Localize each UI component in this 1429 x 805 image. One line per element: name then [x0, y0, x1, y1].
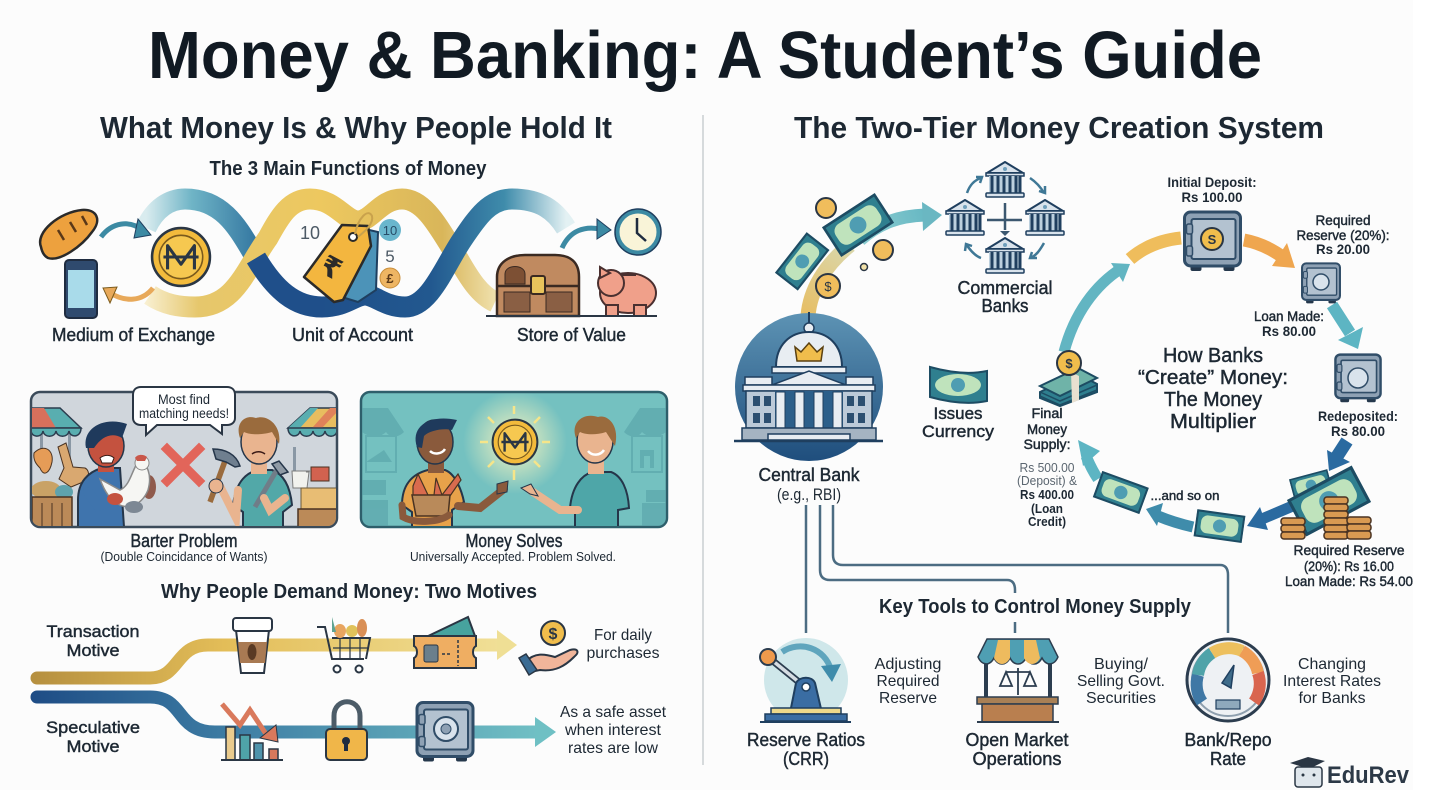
- label: bank repo rate: Bank/Repo: [1184, 730, 1272, 750]
- text: final money supply values: Rs 500.00: [1020, 461, 1075, 475]
- icon: price tag: ₹: [315, 249, 347, 286]
- logo text: EduRev: [1327, 762, 1410, 789]
- icon: market stall with scales: [977, 639, 1059, 722]
- label: transaction motive: [46, 622, 140, 660]
- centre heading: money multiplier: “Create” Money:: [1138, 367, 1288, 389]
- label: central bank: (e.g., RBI): [777, 485, 841, 504]
- icon: coin: [152, 228, 210, 286]
- label: issues currency: Issues: [934, 404, 982, 423]
- panel: commercial banks: [946, 162, 1064, 316]
- arrow head: [103, 287, 117, 303]
- heading: right section: The Two-Tier Money Creation System: [794, 110, 1324, 145]
- subheading: two motives: Why People Demand Money: Two Motives: [161, 581, 537, 603]
- arrow: teal arc to commercial banks: [860, 202, 942, 240]
- label: speculative motive: Motive: [66, 737, 120, 756]
- arrow: gold arc from central bank: [808, 245, 850, 316]
- arc arrow: final supply to initial deposit: [1064, 263, 1130, 352]
- faded stalls: [362, 408, 666, 527]
- illustration background: [31, 392, 337, 527]
- text: numbers around tag: 10: [383, 223, 397, 238]
- subheading: functions: The 3 Main Functions of Money: [210, 158, 487, 180]
- label: open market operations: [966, 730, 1068, 769]
- centre heading: money multiplier: [1138, 345, 1288, 433]
- text: changing interest rates: [1283, 656, 1381, 707]
- label: issues currency: Currency: [922, 422, 995, 441]
- text: buying selling securities: Securities: [1086, 690, 1156, 707]
- text: adjusting required reserve: Required: [876, 673, 940, 690]
- icon: piggy bank: [598, 267, 656, 316]
- label: and so on: ...and so on: [1150, 488, 1220, 503]
- icon: price tag: [304, 213, 378, 302]
- label: redeposited: Rs 80.00: [1331, 423, 1385, 439]
- illustration contents: [362, 390, 666, 527]
- label: loan made: Rs 80.00: [1262, 323, 1316, 339]
- stall: left awning and goods: [31, 408, 89, 527]
- icon: final money stack: $: [1065, 356, 1073, 371]
- icon: banknote centre: [935, 374, 981, 396]
- label: required reserve: Reserve (20%):: [1296, 227, 1390, 243]
- icon: coffee cup: [233, 618, 272, 673]
- icon: reserve safe: [1302, 263, 1340, 303]
- connector lines: central bank to tools: [806, 505, 1228, 633]
- icon: safe: [417, 702, 473, 762]
- icon: falling chart: [221, 704, 283, 760]
- label: commercial banks: Banks: [982, 296, 1028, 316]
- label: loan made: [1254, 308, 1324, 339]
- label: open market operations: Operations: [972, 749, 1062, 769]
- text: final money supply values: (Deposit) &: [1017, 474, 1078, 488]
- label: initial deposit: [1168, 174, 1256, 205]
- arrow: coin to phone: [110, 288, 153, 299]
- panel: open market operations: [966, 639, 1165, 769]
- text: numbers around tag: 5: [385, 247, 395, 266]
- icon: ticket: [414, 617, 476, 668]
- icon: redeposit safe: [1335, 355, 1381, 402]
- figure: customer with groceries: [402, 418, 508, 527]
- icon: hand with coin: [519, 621, 577, 675]
- label: commercial banks: Commercial: [958, 278, 1052, 298]
- icon: money pile and coins: [1281, 468, 1371, 539]
- illustration background: [361, 392, 667, 527]
- caption: money solves: Universally Accepted. Problem Solved.: [410, 549, 616, 564]
- label: final money supply: Final: [1032, 406, 1062, 421]
- arc arrow: orange to reserve: [1244, 240, 1295, 268]
- figure: frustrated man with chicken: [78, 421, 156, 527]
- label: transaction motive: Transaction: [46, 622, 140, 641]
- label: initial deposit: Initial Deposit:: [1168, 174, 1256, 190]
- label: initial deposit: Rs 100.00: [1182, 189, 1243, 205]
- heading: key tools: Key Tools to Control Money Supply: [879, 596, 1192, 618]
- road: transaction motive: [37, 630, 517, 678]
- icon: bank network: [946, 162, 1064, 273]
- icon: red X: [167, 449, 199, 481]
- road: speculative motive: [37, 697, 556, 747]
- label: loan made: Loan Made:: [1254, 308, 1324, 324]
- label: required reserve: Required: [1316, 212, 1370, 228]
- centre heading: money multiplier: How Banks: [1163, 345, 1263, 367]
- text: final money supply values: Credit): [1028, 515, 1066, 529]
- label: central bank: [758, 465, 860, 504]
- label: reserve ratios: Reserve Ratios: [747, 730, 865, 750]
- text: buying selling securities: Buying/: [1094, 656, 1149, 673]
- label: safe asset: rates are low: [568, 740, 658, 757]
- label: barter problem: Barter Problem: [130, 531, 238, 551]
- figure: shopkeeper: [521, 416, 629, 527]
- panel: money multiplier cycle: [1017, 174, 1413, 589]
- label: required reserve: [1296, 212, 1390, 257]
- label: bank repo rate: Rate: [1210, 749, 1246, 769]
- text: numbers around tag: 10: [300, 223, 320, 243]
- icon: banknotes and coins: [776, 195, 893, 298]
- divider: [702, 115, 704, 765]
- icon: bread: [40, 210, 97, 259]
- label: final money supply: [1024, 406, 1070, 452]
- heading: left section: What Money Is & Why People Hold It: [100, 110, 612, 145]
- panel: issues currency: [922, 367, 995, 441]
- label: speculative motive: [46, 718, 140, 756]
- icon: central bank building: [734, 312, 883, 461]
- text: numbers around tag: £: [386, 271, 394, 286]
- icon: glowing coin: [466, 393, 564, 490]
- panel: motives for demanding money: [37, 581, 667, 762]
- panel: reserve ratios: [747, 638, 942, 769]
- ribbon: intertwined gold and blue: [146, 199, 566, 307]
- label: for daily purchases: [586, 627, 660, 662]
- icon: lever: [760, 638, 851, 722]
- label: bank repo rate: [1184, 730, 1272, 769]
- speech bubble: matching needs!: [139, 406, 229, 421]
- text: adjusting required reserve: Adjusting: [874, 656, 942, 673]
- caption: barter: (Double Coincidance of Wants): [100, 549, 268, 564]
- icon: clock: [615, 209, 661, 255]
- label: redeposited: Redeposited:: [1318, 408, 1398, 424]
- label: reserve ratios: (CRR): [783, 749, 829, 769]
- arrow head: [597, 219, 611, 239]
- logo: EduRev: [1290, 757, 1410, 789]
- label: redeposited: [1318, 408, 1398, 439]
- icon: main safe: [1184, 212, 1240, 271]
- centre heading: money multiplier: Multiplier: [1170, 411, 1256, 433]
- arrow: redeposit to money pile: [1327, 441, 1350, 471]
- text: adjusting required reserve: [874, 656, 942, 707]
- text: buying selling securities: Selling Govt.: [1077, 673, 1165, 690]
- label: safe asset: [560, 704, 667, 757]
- panel: money solves: [361, 390, 667, 564]
- arc arrow: gold into safe: [1130, 238, 1181, 259]
- label: required reserve: Rs 20.00: [1316, 241, 1370, 257]
- label: required reserve and loan: Loan Made: Rs 54.00: [1285, 573, 1413, 589]
- label: store of value: Store of Value: [517, 325, 626, 345]
- label: unit of account: Unit of Account: [292, 325, 413, 345]
- label: issues currency: [922, 404, 995, 441]
- icon: note two: [1094, 472, 1148, 513]
- icon: banknotes and coins: $: [824, 279, 832, 294]
- centre heading: money multiplier: The Money: [1164, 389, 1262, 411]
- label: safe asset: when interest: [564, 722, 662, 739]
- ground line: [486, 315, 657, 317]
- arrow: pile to note: [1247, 505, 1295, 530]
- text: adjusting required reserve: Reserve: [879, 690, 937, 707]
- arrow: note to second note: [1146, 503, 1193, 527]
- label: final money supply: Supply:: [1024, 437, 1070, 452]
- icon: hand with coin: $: [549, 626, 558, 643]
- text: final money supply values: [1017, 461, 1078, 529]
- panel: three functions of money: [40, 158, 661, 345]
- label: required reserve and loan: [1285, 542, 1413, 589]
- text: numbers around tag: [300, 219, 401, 288]
- text: changing interest rates: Interest Rates: [1283, 673, 1381, 690]
- label: final money supply: Money: [1027, 422, 1067, 437]
- text: changing interest rates: for Banks: [1298, 690, 1366, 707]
- icon: gauge: [1187, 639, 1269, 721]
- icon: note one: [1195, 510, 1244, 542]
- stall: right awning and counter: [288, 408, 337, 527]
- label: open market operations: Open Market: [966, 730, 1068, 750]
- arrow: chest to clock: [562, 228, 600, 248]
- label: required reserve and loan: (20%): Rs 16.00: [1304, 558, 1394, 574]
- label: for daily purchases: purchases: [586, 645, 660, 662]
- arrow: reserve to redeposit: [1332, 305, 1363, 349]
- icon: treasure chest: [497, 255, 579, 316]
- title: Money & Banking: A Student’s Guide: [148, 18, 1262, 93]
- figure: man with hammer: [209, 417, 292, 527]
- label: medium of exchange: Medium of Exchange: [52, 325, 215, 345]
- label: safe asset: As a safe asset: [560, 704, 667, 721]
- arrow: note to final supply: [1078, 440, 1100, 479]
- illustration contents: [31, 408, 337, 527]
- label: transaction motive: Motive: [66, 641, 120, 660]
- text: buying selling securities: [1077, 656, 1165, 707]
- label: reserve ratios: [747, 730, 865, 769]
- icon: shopping cart: [317, 617, 370, 672]
- label: commercial banks: [958, 278, 1052, 316]
- panel: central bank: [734, 195, 942, 504]
- icon: padlock: [326, 702, 367, 760]
- panel: bank repo rate: [1184, 639, 1381, 769]
- speech bubble: Most find: [158, 392, 210, 407]
- label: required reserve and loan: Required Reserve: [1294, 542, 1405, 558]
- label: speculative motive: Speculative: [46, 718, 140, 737]
- panel: barter problem: [31, 387, 337, 564]
- icon: phone: [65, 260, 97, 318]
- icon: final money stack: [1040, 351, 1097, 406]
- label: money solves: Money Solves: [466, 531, 562, 551]
- icon: banknote: [930, 367, 987, 403]
- label: for daily purchases: For daily: [594, 627, 652, 644]
- icon: main safe: S: [1208, 232, 1217, 247]
- label: central bank: Central Bank: [758, 465, 860, 485]
- arrow: bread to coin: [101, 224, 142, 237]
- text: changing interest rates: Changing: [1298, 656, 1366, 673]
- text: final money supply values: (Loan: [1031, 502, 1063, 516]
- arrow head: [134, 219, 151, 238]
- icon: graduate: [1290, 757, 1325, 787]
- speech bubble: [133, 387, 235, 435]
- text: final money supply values: Rs 400.00: [1020, 488, 1074, 502]
